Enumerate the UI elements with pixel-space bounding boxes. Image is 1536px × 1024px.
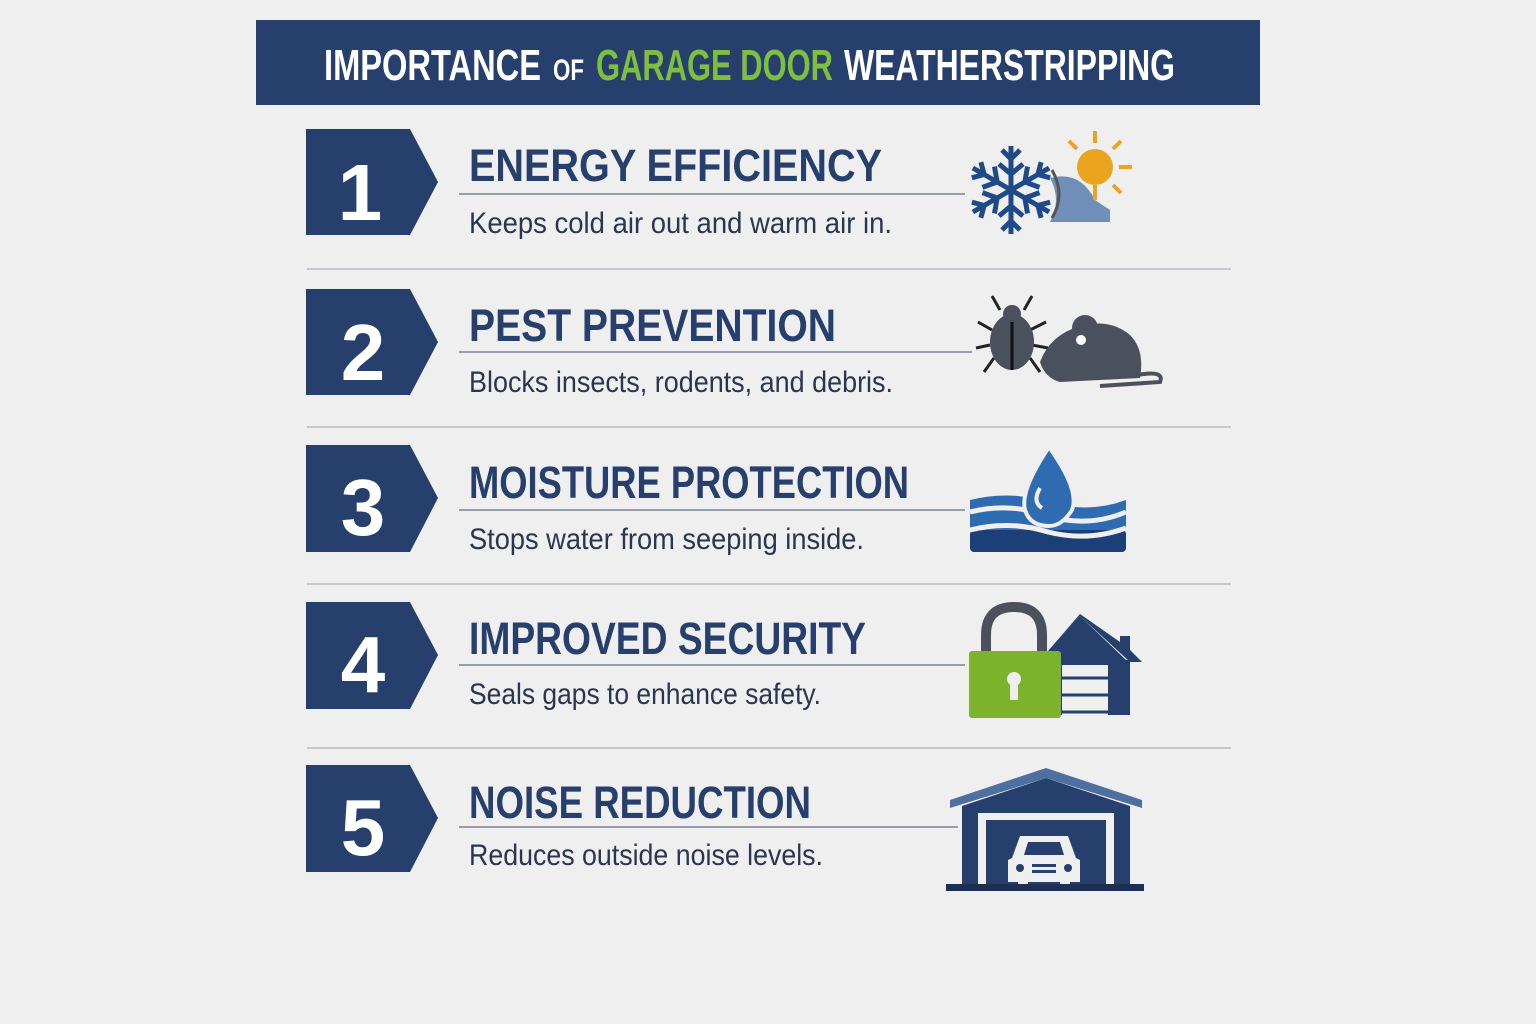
text 1: Keeps cold air out and warm air in. (469, 207, 892, 240)
heading 1: ENERGY EFFICIENCY (469, 140, 882, 191)
badge 4 (306, 602, 438, 709)
icon: snowflake and sun (967, 131, 1132, 234)
row 5: noise reduction (306, 765, 1144, 891)
badge 3 (306, 445, 438, 552)
icon: water drop and waves (970, 447, 1126, 552)
badge 2: 2 (341, 308, 385, 397)
icon: beetle and mouse (976, 296, 1161, 386)
badge 4: 4 (341, 620, 386, 709)
text 4: Seals gaps to enhance safety. (469, 678, 821, 711)
heading 2: PEST PREVENTION (469, 300, 836, 351)
badge 5 (306, 765, 438, 872)
text 3: Stops water from seeping inside. (469, 523, 864, 556)
icon: garage with car (946, 768, 1144, 891)
title: IMPORTANCE (324, 41, 541, 90)
badge 1: 1 (338, 148, 382, 237)
text 5: Reduces outside noise levels. (469, 839, 823, 872)
heading 5: NOISE REDUCTION (469, 777, 811, 828)
row 4: improved security (306, 602, 1142, 718)
badge 2 (306, 289, 438, 397)
heading 3: MOISTURE PROTECTION (469, 457, 909, 508)
badge 5: 5 (341, 783, 385, 872)
row 1: energy efficiency (306, 129, 1132, 240)
badge 3: 3 (341, 463, 385, 552)
title: WEATHERSTRIPPING (844, 41, 1175, 90)
title: GARAGE DOOR (596, 41, 833, 90)
heading 4: IMPROVED SECURITY (469, 613, 866, 664)
badge 1 (306, 129, 438, 237)
row 2: pest prevention (306, 289, 1161, 399)
row 3: moisture protection (306, 445, 1126, 556)
title (256, 20, 1260, 105)
text 2: Blocks insects, rodents, and debris. (469, 366, 893, 399)
title: OF (553, 54, 584, 87)
icon: padlock and house (969, 607, 1142, 718)
